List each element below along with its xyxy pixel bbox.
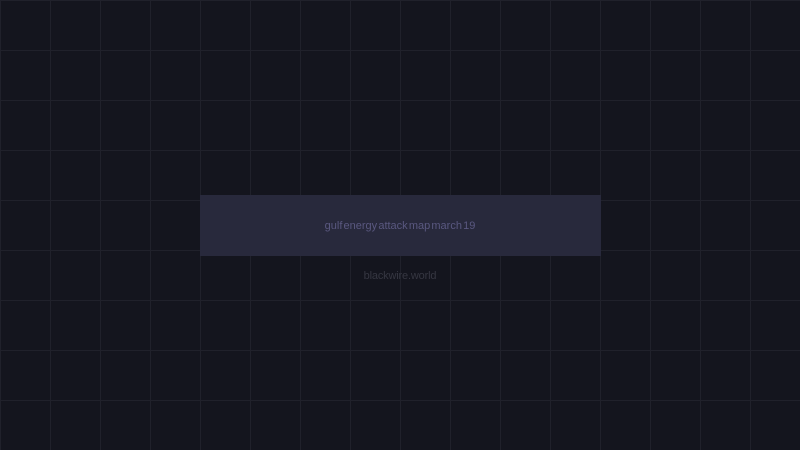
title: gulf energy attack map march 19	[325, 220, 475, 232]
source label: blackwire.world	[364, 270, 436, 282]
banner panel	[200, 195, 601, 256]
